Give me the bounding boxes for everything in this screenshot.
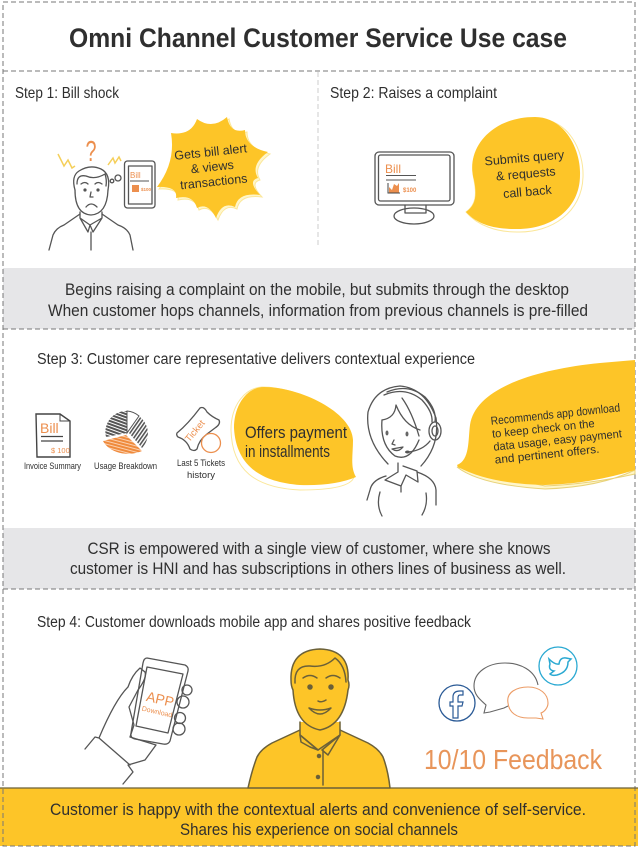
icon: ticket: [177, 408, 220, 452]
callout: bill alert burst: [157, 117, 270, 220]
text: band 3 summary: [50, 800, 586, 839]
icon: worried man: [49, 167, 133, 250]
title: Omni Channel Customer Service Use case: [69, 23, 567, 53]
text: band 1 summary: [48, 280, 588, 320]
icon: tablet with bill: Bill: [130, 171, 141, 180]
callout: recommends app bubble: [457, 360, 635, 489]
callout: recommends app bubble: Recommends app download: [490, 402, 621, 428]
icon: desktop monitor with bill: $100: [403, 188, 417, 194]
callout: submits query bubble: [466, 117, 583, 232]
callout: recommends app bubble: to keep check on the: [492, 418, 595, 441]
icon: invoice document: $ 100: [51, 446, 70, 455]
icon: invoice document: Bill: [40, 420, 59, 436]
label: invoice summary: Invoice Summary: [24, 461, 81, 472]
icon: tablet with bill: $100: [141, 187, 152, 192]
icon: facebook: [439, 685, 475, 721]
icon: tablet with bill: [124, 161, 155, 208]
callout: offers payment bubble: in installments: [245, 443, 330, 461]
callout: recommends app bubble: data usage, easy payment: [493, 428, 623, 454]
text: band 2 summary: CSR is empowered with a single view of customer, where she knows: [88, 540, 550, 558]
icon: question mark: ?: [86, 136, 96, 168]
text: band 3 summary: Customer is happy with the contextual alerts and convenience of self-service.: [50, 800, 586, 819]
callout: submits query bubble: & requests: [495, 164, 556, 184]
callout: bill alert burst: transactions: [180, 171, 248, 192]
chart: usage breakdown pie: [103, 411, 148, 454]
icon: twitter: [539, 647, 577, 685]
heading: step 1: Step 1: Bill shock: [15, 85, 120, 102]
label: last 5 tickets history: history: [187, 470, 215, 481]
text: band 1 summary: When customer hops channels, information from previous channels is pre-filled: [48, 301, 588, 320]
icon: ticket: Ticket: [183, 418, 208, 444]
heading: step 2: Step 2: Raises a complaint: [330, 85, 497, 102]
text: band 3 summary: Shares his experience on social channels: [180, 820, 458, 839]
label: last 5 tickets history: Last 5 Tickets: [177, 458, 225, 469]
callout: bill alert burst: Gets bill alert: [174, 141, 248, 163]
heading: step 4: Step 4: Customer downloads mobile app and shares positive feedback: [37, 614, 471, 631]
callout: bill alert burst: & views: [190, 158, 234, 176]
panel: yellow summary band: [0, 788, 638, 846]
callout: offers payment bubble: Offers payment: [245, 424, 347, 442]
text: feedback score: 10/10 Feedback: [424, 744, 603, 775]
callout: submits query bubble: call back: [503, 183, 553, 201]
callout: submits query bubble: Submits query: [484, 148, 566, 168]
icon: invoice document: [36, 414, 70, 457]
icon: desktop monitor with bill: [375, 152, 454, 224]
label: usage breakdown: Usage Breakdown: [94, 461, 157, 472]
icon: hand holding phone: APP: [145, 688, 176, 710]
icon: customer care representative: [367, 386, 441, 516]
icon: hand holding phone: [85, 658, 192, 784]
icon: hand holding phone: Download: [141, 706, 173, 719]
callout: recommends app bubble: and pertinent offers.: [494, 444, 600, 467]
icon: speech bubbles: [474, 663, 548, 719]
text: band 2 summary: customer is HNI and has subscriptions in others lines of business as well.: [70, 560, 566, 578]
text: band 2 summary: [70, 540, 566, 578]
icon: desktop monitor with bill: Bill: [385, 162, 401, 176]
icon: squiggle right: [108, 157, 121, 165]
text: band 1 summary: Begins raising a complaint on the mobile, but submits through the desktop: [65, 280, 569, 299]
label: last 5 tickets history: [177, 458, 225, 481]
icon: squiggle left: [58, 154, 75, 168]
panel: grey summary band 1: [3, 268, 635, 329]
icon: happy customer: [248, 649, 390, 788]
callout: offers payment bubble: [231, 387, 356, 490]
heading: step 3: Step 3: Customer care representative delivers contextual experience: [37, 351, 475, 368]
panel: grey summary band 2: [3, 528, 635, 589]
